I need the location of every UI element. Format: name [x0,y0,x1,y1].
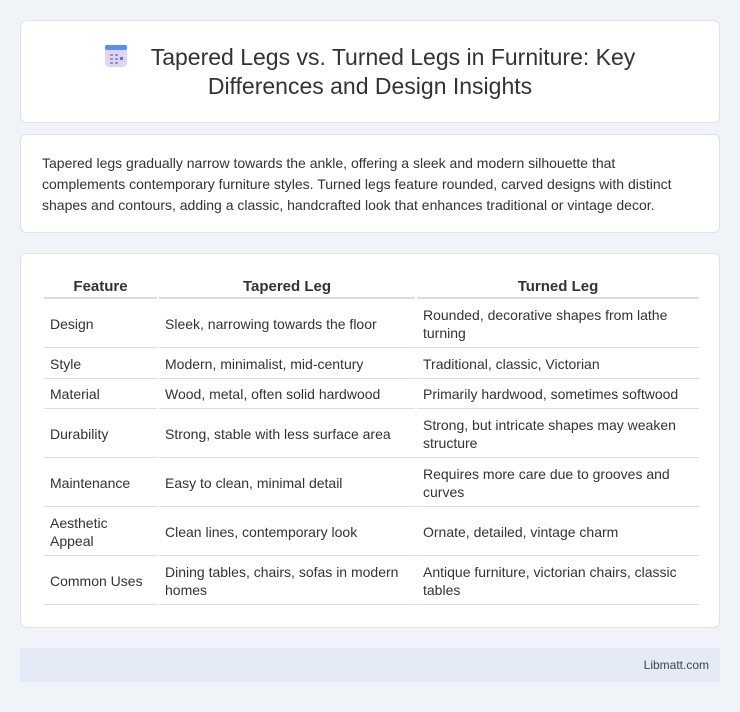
title card [20,20,720,123]
table: Common Uses [50,572,143,588]
footer: Libmatt.com [644,658,709,672]
table: Wood, metal, often solid hardwood [165,386,380,402]
table: Traditional, classic, Victorian [423,356,600,372]
panel: comparison table [20,253,720,628]
table: Primarily hardwood, sometimes softwood [423,386,678,402]
table: Antique furniture, victorian chairs, classic tables [423,564,677,598]
table: Material [50,386,100,402]
table: Sleek, narrowing towards the floor [165,316,377,332]
table: Dining tables, chairs, sofas in modern homes [165,564,398,598]
table: Turned Leg [518,278,598,295]
table: Maintenance [50,474,130,490]
table: Modern, minimalist, mid-century [165,356,363,372]
table: Easy to clean, minimal detail [165,474,342,490]
table: Strong, but intricate shapes may weaken structure [423,416,676,450]
table: Clean lines, contemporary look [165,524,357,540]
table: Requires more care due to grooves and curves [423,466,670,500]
table: Design [50,316,94,332]
heading: Tapered Legs vs. Turned Legs in Furniture: Key Differences and Design Insights [151,44,635,98]
intro text: Tapered legs gradually narrow towards the ankle, offering a sleek and modern silhouette that complements contemporary furniture styles. Turned legs feature rounded, carved designs with distinct shapes and contours, adding a classic, handcrafted look that enhances traditional or vintage decor. [42,155,672,213]
table: Rounded, decorative shapes from lathe turning [423,306,667,340]
footer [20,648,720,682]
table: Style [50,356,81,372]
table: Strong, stable with less surface area [165,426,391,442]
table: Ornate, detailed, vintage charm [423,524,618,540]
intro text [20,134,720,233]
table: Tapered Leg [243,278,331,295]
table [44,278,699,605]
table: Aesthetic Appeal [50,514,108,548]
table: Feature [73,278,128,295]
table: Durability [50,426,108,442]
icon: calendar [105,45,127,67]
